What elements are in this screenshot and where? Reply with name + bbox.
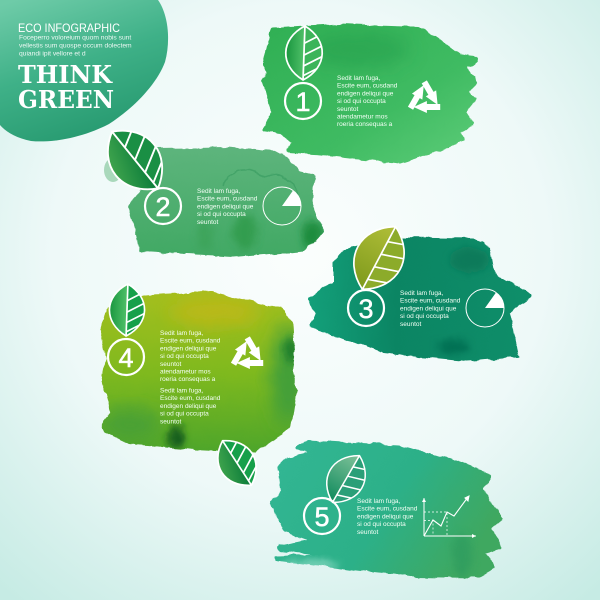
intro text: quiandi ipit vellore et d xyxy=(19,50,86,58)
text block 1: Escite eum, cusdand xyxy=(337,83,398,90)
pie icon 2 xyxy=(263,187,301,225)
number 3 xyxy=(348,290,384,326)
brush stroke 2 xyxy=(128,146,324,257)
text block 5: Escite eum, cusdand xyxy=(357,506,418,513)
panel 1 xyxy=(261,23,478,164)
text block 1: si od qui occupta xyxy=(337,98,386,105)
text block 3: seuntot xyxy=(400,321,422,328)
text block 1: Sedit lam fuga, xyxy=(337,75,381,82)
leaf 5 xyxy=(326,454,366,504)
text block 1: atendametur mos xyxy=(337,114,388,120)
text block 4: endigen deliqui que xyxy=(160,403,217,410)
pie icon 3 xyxy=(466,289,504,327)
brush stroke 4 xyxy=(95,288,305,458)
number 4 xyxy=(108,339,144,375)
text block 4: Sedit lam fuga, xyxy=(160,330,204,337)
text block 5: si od qui occupta xyxy=(357,521,406,528)
panel 4 xyxy=(95,283,305,495)
text block 1: endigen deliqui que xyxy=(337,90,394,97)
text block 2: si od qui occupta xyxy=(197,211,246,218)
brush stroke 3 xyxy=(308,236,532,362)
number 2 xyxy=(145,188,181,224)
text block 3: si od qui occupta xyxy=(400,313,449,320)
text block 4: si od qui occupta xyxy=(160,353,209,360)
number 3: 3 xyxy=(358,294,374,324)
leaf 2 xyxy=(107,130,164,190)
panel 5 xyxy=(270,440,503,579)
text block 1: roeria consequas a xyxy=(337,121,393,128)
text block 4: si od qui occupta xyxy=(160,411,209,418)
text block 2: Escite eum, cusdand xyxy=(197,196,258,203)
leaf 1 xyxy=(285,25,327,81)
decorative leaf xyxy=(217,440,257,486)
text block 3: Escite eum, cusdand xyxy=(400,298,461,305)
title: think green: THINK xyxy=(18,60,113,89)
leaf 4 xyxy=(109,283,149,337)
panel 2 xyxy=(104,130,324,257)
title: think green xyxy=(18,60,114,114)
intro text: vellestis sum quospe occum dolectem xyxy=(19,42,132,50)
number 1 xyxy=(285,83,321,119)
panel: header xyxy=(0,0,168,141)
text block 5: Sedit lam fuga, xyxy=(357,498,401,505)
intro text: Foceperro voloreium quom nobis sunt xyxy=(19,34,131,42)
text block 4: roeria consequas a xyxy=(160,376,216,383)
text block 4: seuntot xyxy=(160,418,182,425)
brush stroke 1 xyxy=(261,23,478,164)
text block 4: Sedit lam fuga, xyxy=(160,388,204,394)
icon: recycle xyxy=(231,335,269,377)
text block 4: atendametur mos xyxy=(160,368,211,376)
text block 1: seuntot xyxy=(337,106,359,113)
text block 2: seuntot xyxy=(197,219,219,226)
text block 3: Sedit lam fuga, xyxy=(400,290,444,297)
text block 4: endigen deliqui que xyxy=(160,345,217,352)
number 1: 1 xyxy=(295,87,311,117)
brush stroke 5 xyxy=(270,440,503,579)
text block 5: seuntot xyxy=(357,529,379,536)
watercolor blob xyxy=(0,0,168,141)
number 5 xyxy=(304,498,340,534)
text block 5: endigen deliqui que xyxy=(357,513,414,520)
leaf 3 xyxy=(353,226,405,290)
panel 3 xyxy=(308,226,532,362)
text block 4: Escite eum, cusdand xyxy=(160,338,221,345)
pale wash behind leaf xyxy=(104,158,122,182)
text block 3: endigen deliqui que xyxy=(400,305,457,312)
text block 2: Sedit lam fuga, xyxy=(197,188,241,195)
title: think green: GREEN xyxy=(18,85,114,114)
text block 2: endigen deliqui que xyxy=(197,203,254,210)
text block 4: Escite eum, cusdand xyxy=(160,395,221,402)
text block 4: seuntot xyxy=(160,361,182,368)
number 4: 4 xyxy=(118,343,134,373)
number 2: 2 xyxy=(155,192,171,222)
number 5: 5 xyxy=(314,502,330,532)
heading: eco infographic: ECO INFOGRAPHIC xyxy=(18,21,120,35)
line chart icon xyxy=(422,496,476,538)
icon: recycle xyxy=(408,79,446,121)
